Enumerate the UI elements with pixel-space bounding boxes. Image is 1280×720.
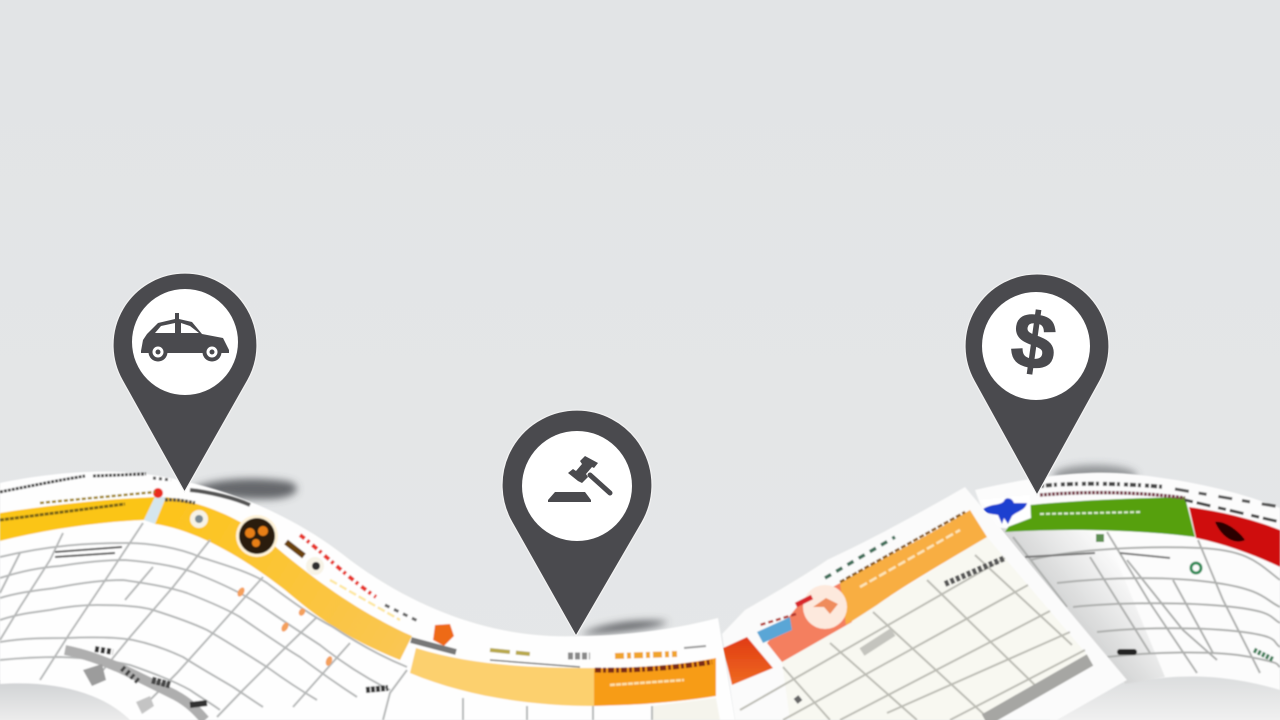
panel: middle-right chart sheet (722, 487, 1127, 720)
panel: left and centre chart sheet (0, 472, 735, 720)
pale blue divider (144, 497, 166, 524)
small emblems on band (153, 488, 324, 575)
icon: car (141, 313, 229, 362)
chart marks (760, 512, 1005, 702)
blue tab (757, 617, 792, 643)
beige corner (652, 698, 720, 720)
red band mark (1215, 522, 1245, 542)
orange band 4 (594, 658, 716, 706)
gray chart blocks (55, 547, 388, 714)
gray bar (985, 660, 1090, 720)
red and dark header scribbles (0, 474, 712, 685)
pin: dollar (965, 274, 1109, 495)
blue badge (980, 495, 1031, 528)
icon: gavel (548, 456, 610, 502)
gray chart bar (65, 650, 205, 720)
yellow band 1 (0, 497, 155, 541)
yellow band 2 (155, 497, 412, 660)
header scribbles (1040, 484, 1280, 522)
pin: car (113, 273, 257, 492)
bottom corner shadows (0, 670, 1280, 720)
pin: gavel (502, 410, 652, 636)
pin ground shadows (190, 465, 1137, 635)
round black and orange emblem (236, 515, 278, 557)
panel: right chart sheet (975, 473, 1280, 690)
flame markers (236, 586, 334, 667)
pale yellow band 3 (410, 648, 594, 706)
coral and orange band (767, 583, 852, 662)
red-orange tab (723, 637, 773, 685)
icon: dollar sign: $ (1006, 294, 1062, 388)
orange block emblem (411, 624, 456, 652)
small chart marks (1025, 534, 1274, 660)
